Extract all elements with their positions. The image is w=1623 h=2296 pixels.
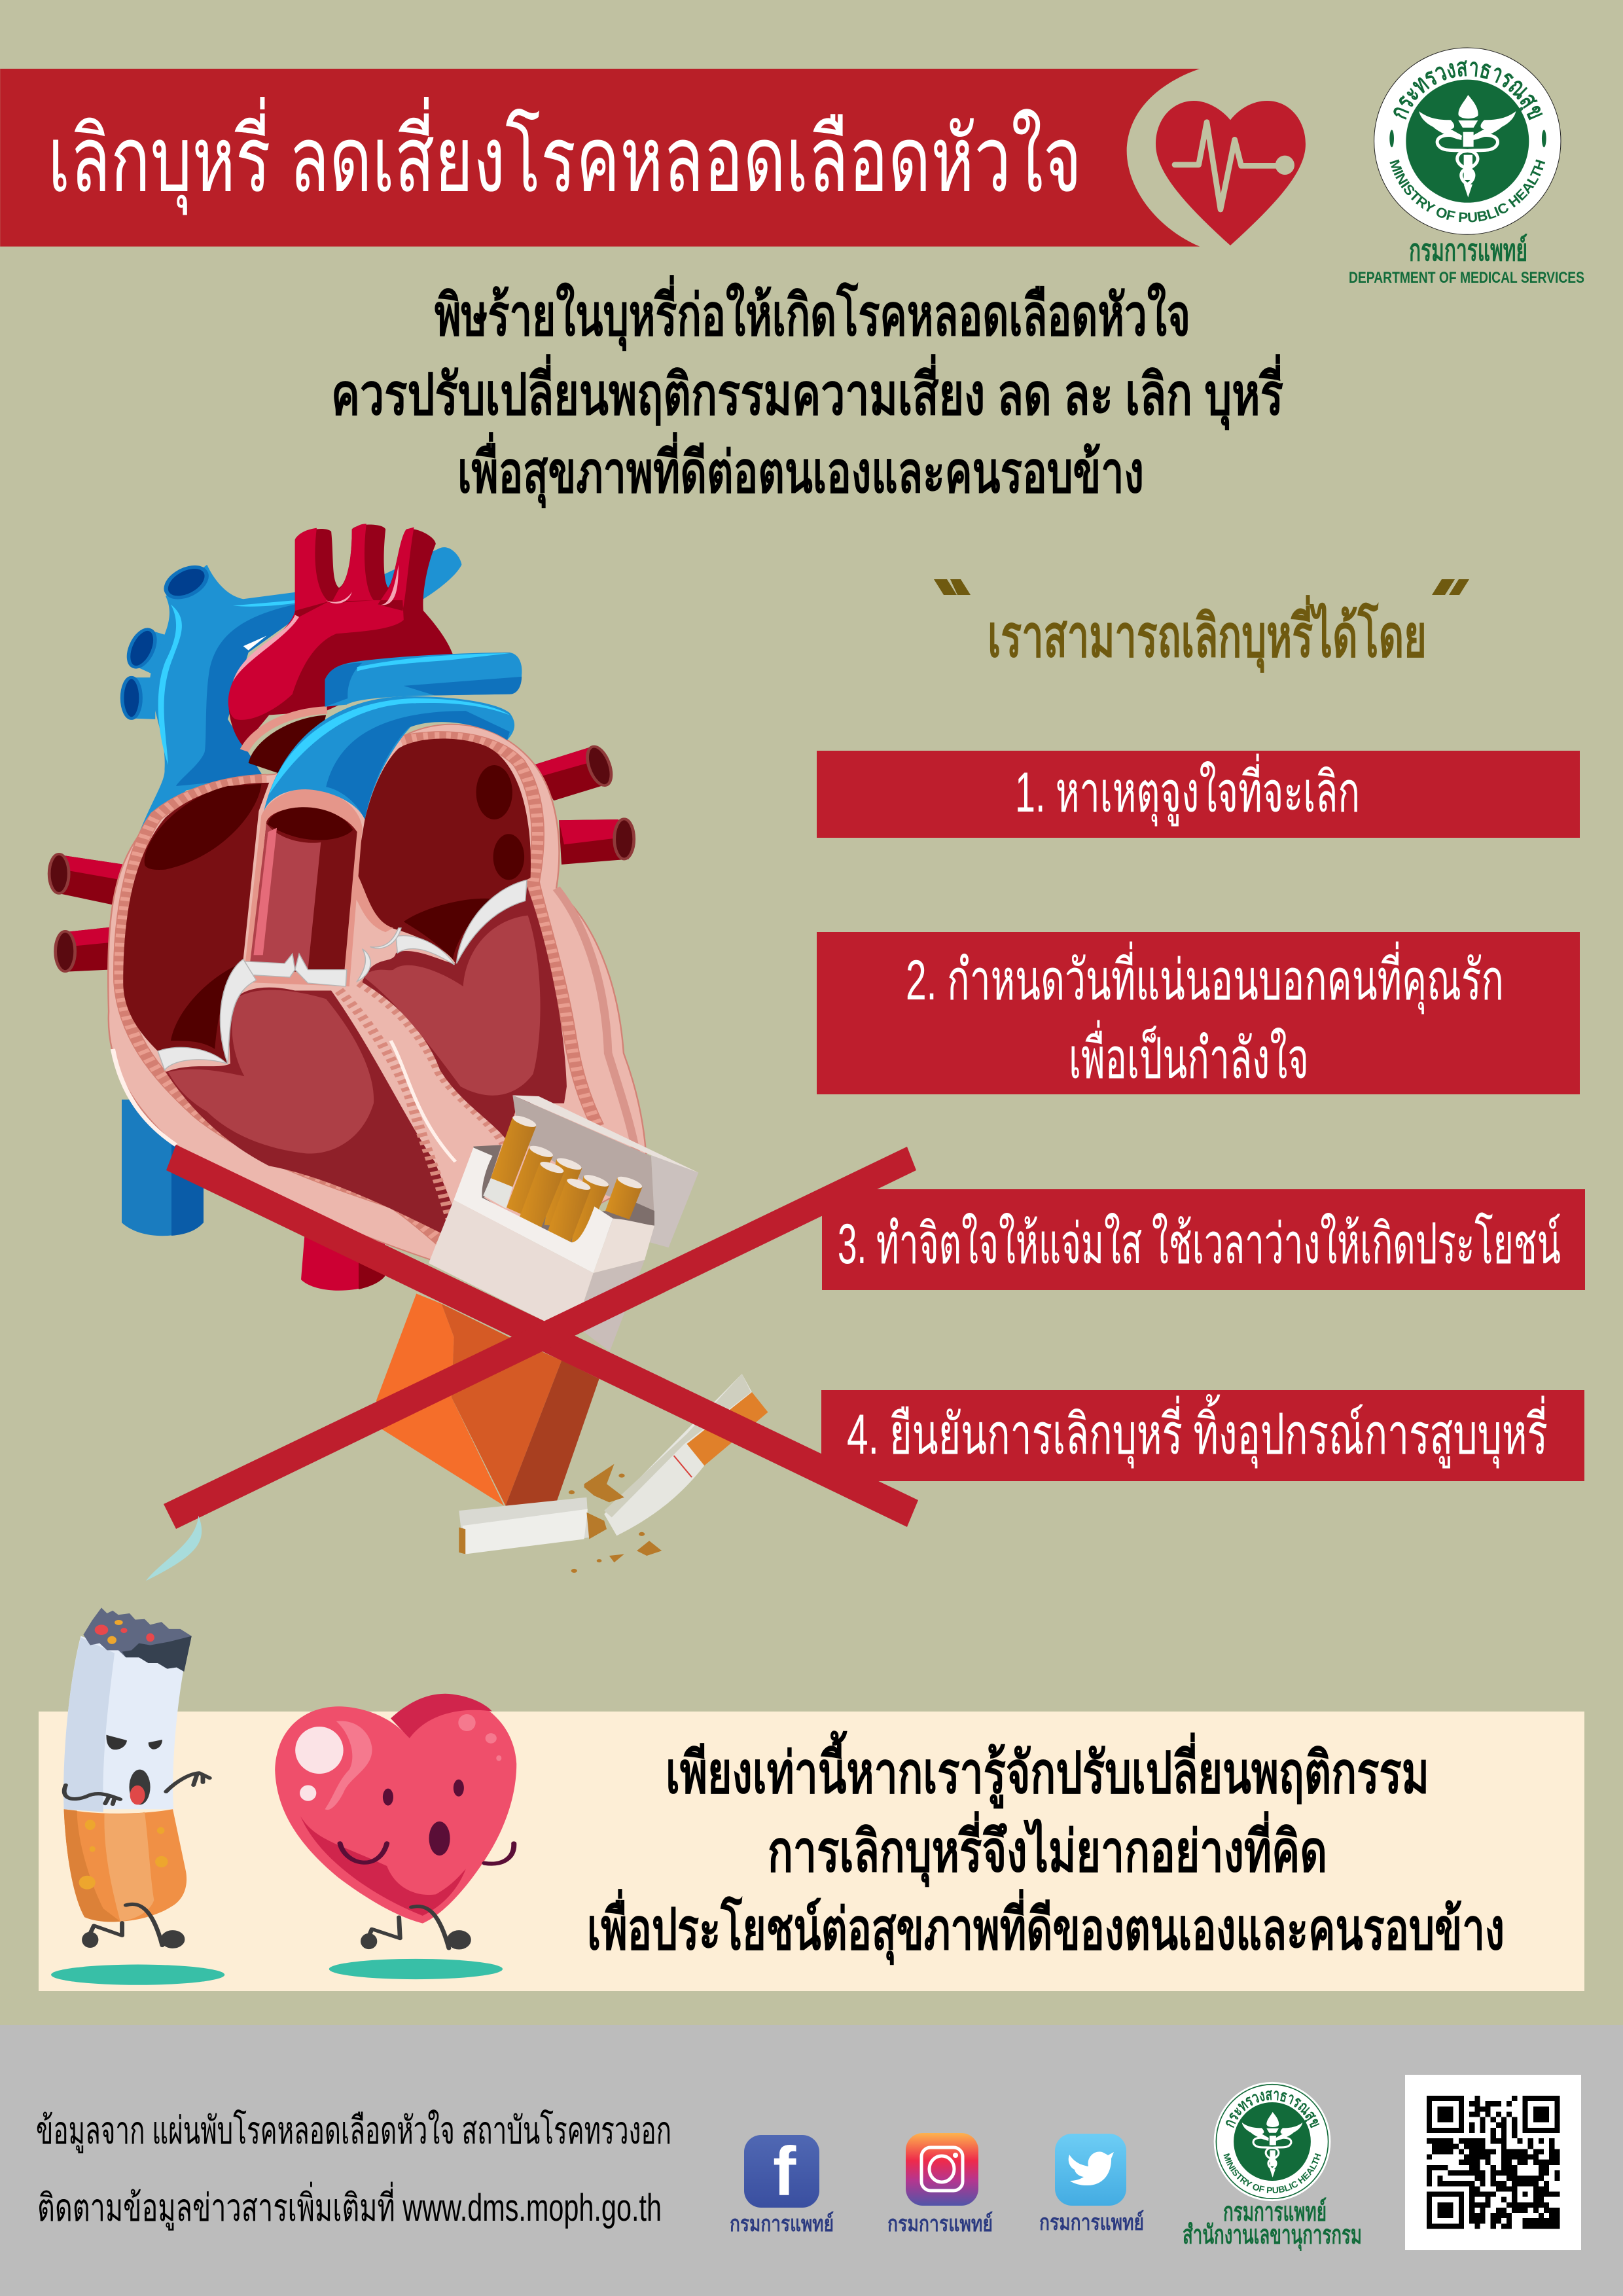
illustration: heart character <box>275 1694 516 1979</box>
step 1: 1. หาเหตุจูงใจที่จะเลิก <box>1015 753 1360 827</box>
illustration: cigarette character <box>51 1607 224 1985</box>
pulmonary veins red <box>49 744 634 972</box>
septum <box>336 982 505 1258</box>
footer seal caption <box>1183 2197 1362 2251</box>
icon: instagram <box>887 2133 993 2236</box>
footer seal caption: กรมการแพทย์ <box>1223 2197 1327 2227</box>
pack lid <box>473 1095 698 1247</box>
right atrium chamber <box>123 783 269 1064</box>
icon: facebook <box>730 2133 834 2236</box>
step 4 <box>821 1390 1584 1481</box>
intro text block: เพื่อสุขภาพที่ดีต่อตนเองและคนรอบข้าง <box>457 432 1144 509</box>
logo: footer seal <box>1213 2081 1331 2202</box>
QR code <box>1405 2075 1581 2250</box>
footer source text <box>36 2109 671 2231</box>
heart vessels lower <box>122 1100 385 1291</box>
right ventricle chamber <box>166 988 466 1246</box>
logo: footer seal: กระทรวงสาธารณสุข <box>1226 2090 1319 2128</box>
red X bar: bottom-left to top-right <box>164 1147 916 1529</box>
step 2 <box>817 932 1580 1094</box>
logo: Ministry of Public Health seal: MINISTRY OF PUBLIC HEALTH <box>1390 160 1546 223</box>
pack front <box>429 1147 654 1352</box>
logo: Ministry of Public Health seal <box>1374 47 1561 235</box>
footer source text: ติดตามข้อมูลข่าวสารเพิ่มเติมที่ www.dms.moph.go.th <box>37 2181 662 2231</box>
illustration: burnt stick behind pack <box>376 1294 599 1506</box>
intro text block: พิษร้ายในบุหรี่ก่อให้เกิดโรคหลอดเลือดหัวใจ <box>435 275 1190 351</box>
heart outer wall <box>108 725 647 1260</box>
outer wall shading <box>556 888 637 1162</box>
panel: closing message: การเลิกบุหรี่จึงไม่ยากอย่างที่คิด <box>768 1811 1327 1888</box>
title: เลิกบุหรี่ ลดเสี่ยงโรคหลอดเลือดหัวใจ <box>48 97 1082 215</box>
logo: Ministry of Public Health seal: กระทรวงสาธารณสุข <box>1393 60 1543 120</box>
cigarette face <box>106 1735 162 1804</box>
icon: facebook: f <box>773 2133 796 2210</box>
pulmonary vein blue back <box>378 547 461 599</box>
step 1 <box>817 751 1580 838</box>
vena cava <box>122 561 298 842</box>
icon: twitter <box>1039 2134 1144 2235</box>
quote heading <box>934 579 1469 673</box>
left ventricle chamber <box>363 882 567 1141</box>
central aorta tube <box>243 788 363 986</box>
aortic arch ring <box>244 710 327 774</box>
red X bar: top-left to bottom-right <box>166 1145 918 1527</box>
panel: footer <box>0 2025 1623 2296</box>
cigarette limbs <box>64 1773 209 1946</box>
septum notch <box>352 874 393 932</box>
icon: facebook: กรมการแพทย์ <box>730 2211 834 2236</box>
heart face <box>340 1780 464 1863</box>
heart valves <box>158 880 527 1070</box>
smoke wisp <box>146 1516 202 1581</box>
icon: twitter: กรมการแพทย์ <box>1039 2210 1144 2235</box>
right-side muscle ring <box>401 736 597 1126</box>
title banner <box>0 69 1200 247</box>
illustration: cigarette pack <box>429 1095 698 1352</box>
logo caption: department: กรมการแพทย์ <box>1409 233 1527 267</box>
footer seal caption: สำนักงานเลขานุการกรม <box>1183 2221 1362 2251</box>
logo caption: department <box>1349 233 1584 287</box>
icon: heart with ECG line <box>1156 101 1306 245</box>
left atrium chamber <box>357 739 531 963</box>
intro text block: ควรปรับเปลี่ยนพฤติกรรมความเสี่ยง ลด ละ เลิก บุหรี่ <box>331 354 1283 431</box>
step 2: เพื่อเป็นกำลังใจ <box>1069 1020 1309 1090</box>
aorta <box>228 524 453 746</box>
intro text block <box>331 275 1283 509</box>
logo: footer seal: MINISTRY OF PUBLIC HEALTH <box>1224 2153 1321 2193</box>
panel: closing message <box>39 1712 1584 1991</box>
left chambers muscle ring <box>120 780 466 1262</box>
illustration: broken cigarette <box>459 1374 768 1573</box>
cigarettes in pack <box>483 1113 643 1242</box>
footer source text: ข้อมูลจาก แผ่นพับโรคหลอดเลือดหัวใจ สถาบันโรคทรวงอก <box>36 2109 671 2153</box>
heart limbs <box>363 1843 514 1948</box>
illustration: heart cross-section <box>49 524 647 1291</box>
icon: instagram: กรมการแพทย์ <box>887 2211 993 2236</box>
step 3 <box>822 1189 1585 1290</box>
pulmonary trunk blue <box>264 653 522 819</box>
